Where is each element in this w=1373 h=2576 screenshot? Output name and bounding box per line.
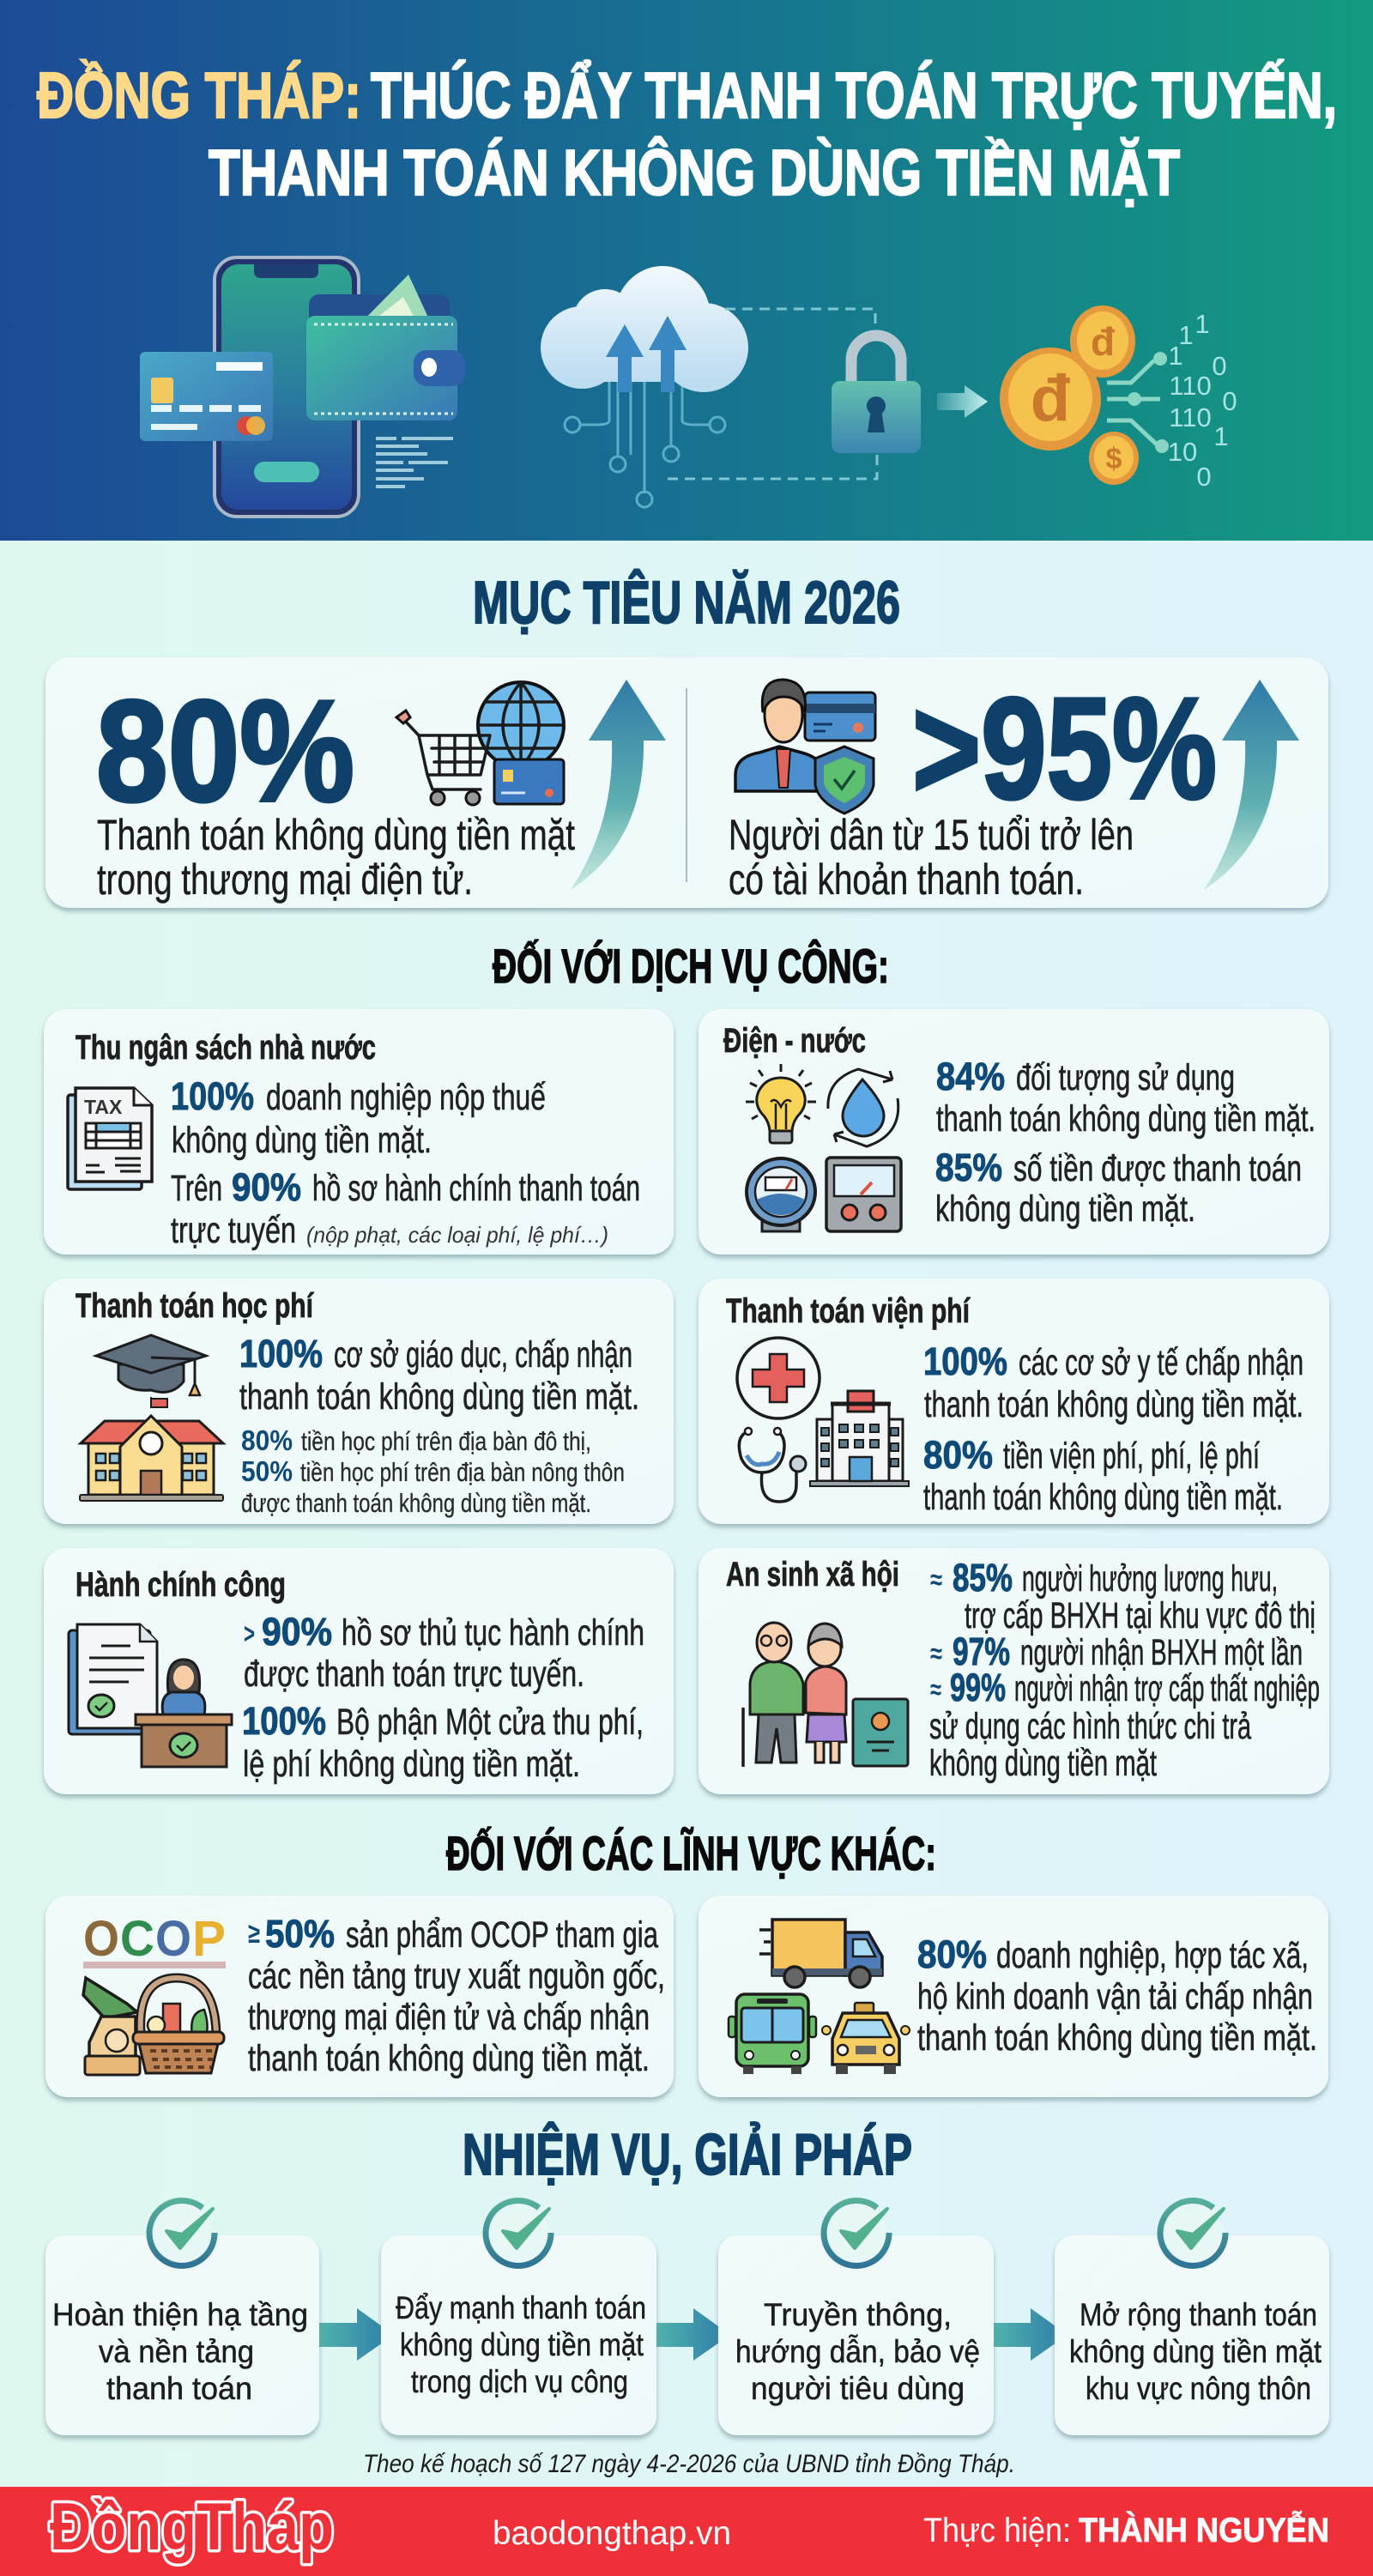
text: account goal: Người dân từ 15 tuổi trở lên: [729, 811, 1134, 859]
panel: public administration: [44, 1548, 674, 1794]
icon: OCOP logo and basket: O: [155, 1911, 191, 1967]
text: tax stats: [171, 1074, 640, 1251]
text: admin stats: lệ phí không dùng tiền mặt.: [243, 1744, 580, 1785]
source note: Theo kế hoạch số 127 ngày 4-2-2026 của UBND tỉnh Đồng Tháp.: [363, 2450, 1015, 2478]
text: tuition stats: 100%: [239, 1332, 323, 1376]
arrow up: left: [571, 680, 666, 890]
panel: hospital fees: [699, 1279, 1329, 1524]
text: e-commerce goal: [97, 811, 575, 904]
icon: coins with binary data: 0: [1222, 386, 1237, 416]
text: step 4: Mở rộng thanh toán: [1080, 2297, 1317, 2332]
panel heading: Thanh toán học phí: [76, 1287, 314, 1325]
panel heading: An sinh xã hội: [726, 1556, 899, 1593]
text: tax stats: không dùng tiền mặt.: [172, 1120, 432, 1161]
heading: other sectors: ĐỐI VỚI CÁC LĨNH VỰC KHÁC:: [446, 1826, 936, 1880]
panel heading: Thanh toán viện phí: [726, 1292, 971, 1330]
text: social security stats: 85%: [953, 1556, 1013, 1599]
text: hospital stats: 100%: [923, 1339, 1007, 1383]
text: admin stats: được thanh toán trực tuyến.: [244, 1654, 584, 1695]
stat: 80%: 80%: [96, 670, 354, 831]
text: step 2: trong dịch vụ công: [411, 2364, 628, 2399]
text: tax stats: trực tuyến: [171, 1210, 296, 1251]
icon: coins with binary data: 110: [1169, 371, 1212, 401]
text: transport goal: [917, 1932, 1317, 2059]
icon: OCOP logo and basket: P: [192, 1911, 226, 1967]
icon: coins with binary data: 0: [1212, 351, 1227, 381]
text: utility stats: 85%: [935, 1146, 1002, 1189]
text: admin stats: [242, 1610, 644, 1785]
panel: goals: [45, 657, 1328, 908]
text: tax stats: 100%: [171, 1074, 254, 1118]
arrow: step 1 to 2: [319, 2308, 394, 2361]
panel heading: Thu ngân sách nhà nước: [76, 1029, 376, 1067]
icon: coins with binary data: 1: [1178, 320, 1194, 350]
credit: THÀNH NGUYỄN: [1079, 2510, 1329, 2549]
panel heading: Hành chính công: [76, 1566, 286, 1604]
icon: coins with binary data: 1: [1213, 421, 1229, 451]
icon: check ring: [1160, 2200, 1225, 2265]
icon: check ring: [486, 2200, 551, 2265]
text: e-commerce goal: Thanh toán không dùng tiền mặt: [97, 811, 575, 859]
text: admin stats: hồ sơ thủ tục hành chính: [342, 1612, 644, 1654]
text: OCOP goal: ≥: [248, 1917, 260, 1949]
panel: step 4: [1055, 2200, 1329, 2435]
text: tax stats: (nộp phạt, các loại phí, lệ phí…): [306, 1222, 608, 1248]
icon: coins with binary data: 0: [1196, 462, 1212, 492]
text: OCOP goal: các nền tảng truy xuất nguồn gốc,: [248, 1956, 665, 1997]
text: tuition stats: cơ sở giáo dục, chấp nhận: [334, 1334, 632, 1376]
text: step 1: Hoàn thiện hạ tầng: [52, 2297, 308, 2332]
text: step 1: và nền tảng: [99, 2334, 254, 2369]
text: step 2: Đẩy mạnh thanh toán: [396, 2290, 646, 2325]
text: step 3: người tiêu dùng: [751, 2371, 965, 2406]
text: OCOP goal: 50%: [265, 1912, 335, 1956]
text: utility stats: [935, 1055, 1316, 1230]
icon: coins with binary data: đ: [1091, 319, 1115, 364]
panel: social security: [699, 1548, 1329, 1794]
text: tuition stats: tiền học phí trên địa bàn nông thôn: [300, 1457, 625, 1487]
icon: coins with binary data: 110: [1169, 402, 1212, 432]
text: step 1: thanh toán: [106, 2371, 252, 2406]
text: tuition stats: [239, 1332, 639, 1518]
text: admin stats: 90%: [262, 1610, 332, 1654]
footer bar: [0, 2487, 1373, 2576]
text: tax stats: hồ sơ hành chính thanh toán: [312, 1168, 640, 1209]
panel: step 2: [381, 2200, 656, 2435]
website: baodongthap.vn: [493, 2515, 731, 2552]
icon: coins with binary data: đ: [1031, 362, 1071, 435]
text: admin stats: >: [244, 1618, 255, 1649]
text: step 2: không dùng tiền mặt: [400, 2327, 644, 2362]
text: utility stats: không dùng tiền mặt.: [935, 1188, 1195, 1230]
icon: coins with binary data: [1000, 305, 1237, 492]
title: [37, 59, 1337, 209]
text: account goal: [729, 811, 1134, 904]
icon: tax form: [68, 1088, 152, 1189]
icon: padlock: [832, 336, 921, 453]
credit: Thực hiện:: [923, 2512, 1071, 2549]
text: social security stats: ≈: [930, 1563, 942, 1595]
icon: OCOP logo and basket: [83, 1911, 226, 2075]
text: step 4: khu vực nông thôn: [1086, 2371, 1311, 2406]
icon: cart, globe and card: [396, 682, 564, 805]
icon: graduation cap and school: [80, 1335, 223, 1501]
panel: step 3: [718, 2200, 994, 2435]
icon: medical cross, hospital, stethoscope: [737, 1338, 909, 1502]
icon: cloud with circuit lines: [541, 266, 877, 507]
text: step 4: không dùng tiền mặt: [1069, 2334, 1322, 2369]
icon: elderly couple with booklet: [743, 1623, 908, 1767]
arrow: step 2 to 3: [656, 2308, 730, 2361]
panel heading: Điện - nước: [723, 1022, 866, 1060]
text: hospital stats: [923, 1339, 1303, 1518]
heading: goals 2026: MỤC TIÊU NĂM 2026: [473, 568, 900, 636]
panel: electricity and water: [699, 1009, 1329, 1255]
text: tuition stats: 50%: [241, 1455, 293, 1487]
icon: person with card and shield: [735, 680, 875, 813]
text: step 2: [396, 2290, 646, 2399]
text: e-commerce goal: trong thương mại điện tử.: [97, 856, 473, 904]
text: step 3: hướng dẫn, bảo vệ: [735, 2334, 980, 2369]
icon: bulb, water, meters: [746, 1064, 901, 1231]
text: transport goal: 80%: [917, 1932, 987, 1976]
icon: OCOP logo and basket: O: [83, 1911, 119, 1967]
text: tax stats: doanh nghiệp nộp thuế: [266, 1077, 546, 1118]
icon: truck, bus and taxi: [729, 1920, 910, 2074]
title: ĐỒNG THÁP:: [37, 59, 361, 131]
heading: public services: ĐỐI VỚI DỊCH VỤ CÔNG:: [493, 939, 889, 993]
panel: OCOP: [45, 1896, 674, 2097]
text: admin stats: Bộ phận Một cửa thu phí,: [336, 1702, 644, 1743]
panel: tuition: [44, 1279, 674, 1524]
text: tax stats: Trên: [171, 1168, 222, 1209]
text: OCOP goal: [248, 1912, 665, 2079]
text: OCOP goal: sản phẩm OCOP tham gia: [346, 1914, 658, 1956]
arrow up: right: [1204, 680, 1299, 890]
icon: coins with binary data: 1: [1168, 341, 1183, 371]
header banner: [0, 0, 1373, 541]
panel: state budget: [44, 1009, 674, 1255]
text: social security stats: ≈: [930, 1673, 941, 1705]
text: account goal: có tài khoản thanh toán.: [729, 856, 1084, 904]
text: tuition stats: thanh toán không dùng tiền mặt.: [239, 1376, 639, 1418]
text: utility stats: đối tượng sử dụng: [1016, 1057, 1235, 1098]
icon: check ring: [824, 2200, 889, 2265]
text: hospital stats: 80%: [923, 1433, 993, 1477]
heading: tasks and solutions: NHIỆM VỤ, GIẢI PHÁP: [463, 2121, 912, 2187]
text: utility stats: 84%: [936, 1055, 1005, 1098]
credit: [923, 2510, 1329, 2549]
text: step 4: [1069, 2297, 1322, 2406]
text: tuition stats: tiền học phí trên địa bàn đô thị,: [301, 1426, 591, 1456]
logo: ĐồngTháp: [50, 2488, 334, 2564]
text: step 3: Truyền thông,: [764, 2297, 952, 2332]
icon: document and service desk: [69, 1624, 232, 1767]
icon: OCOP logo and basket: C: [120, 1911, 154, 1967]
panel: step 1: [45, 2200, 319, 2435]
text: social security stats: 97%: [953, 1630, 1010, 1673]
text: tuition stats: 80%: [241, 1424, 293, 1456]
icon: tax form: TAX: [84, 1096, 123, 1118]
icon: coins with binary data: $: [1106, 443, 1122, 475]
text: admin stats: 100%: [242, 1699, 326, 1743]
icon: coins with binary data: 1: [1195, 309, 1210, 339]
icon: coins with binary data: 10: [1168, 437, 1197, 467]
icon: check ring: [149, 2200, 215, 2265]
text: tuition stats: được thanh toán không dùng tiền mặt.: [241, 1488, 591, 1518]
text: social security stats: không dùng tiền mặt: [929, 1743, 1157, 1784]
text: step 1: [52, 2297, 308, 2406]
text: social security stats: [929, 1556, 1320, 1784]
text: social security stats: 99%: [950, 1666, 1006, 1709]
text: social security stats: ≈: [930, 1637, 942, 1669]
text: step 3: [735, 2297, 980, 2406]
icon: phone with wallet and card: [140, 257, 465, 517]
text: OCOP goal: thương mại điện tử và chấp nhận: [248, 1997, 650, 2038]
arrow: step 3 to 4: [994, 2308, 1068, 2361]
text: tax stats: 90%: [232, 1165, 301, 1209]
page background: [0, 542, 1373, 2487]
panel: transport: [699, 1896, 1328, 2097]
stat: >95%: >95%: [912, 668, 1217, 829]
text: OCOP goal: thanh toán không dùng tiền mặt.: [248, 2038, 650, 2079]
arrow: lock to coins: [937, 385, 988, 418]
